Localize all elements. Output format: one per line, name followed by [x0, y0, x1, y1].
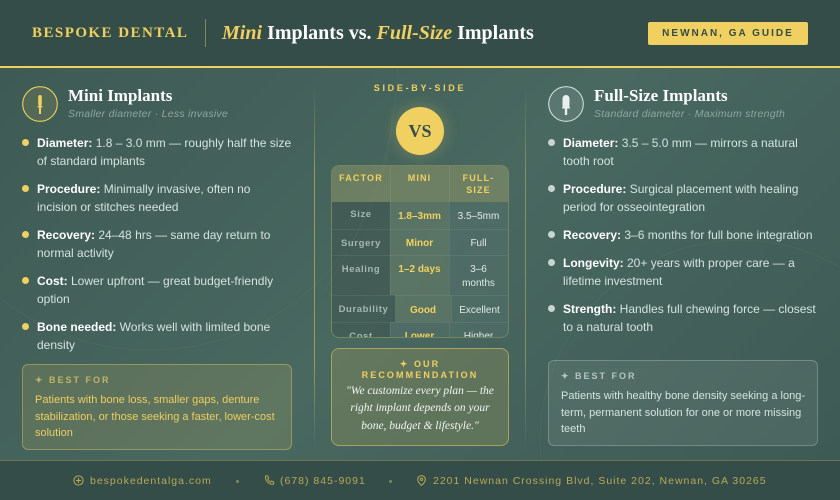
label: ✦ BEST FOR [561, 371, 637, 381]
bullet list: Recovery: 3–6 months for full bone integration [563, 228, 812, 242]
VS badge: VS [408, 121, 432, 141]
comparison table: Healing [342, 264, 380, 275]
footer [0, 460, 840, 500]
icon: mini implant [22, 86, 58, 122]
bullet list: tooth root [563, 154, 614, 168]
bullet list: of standard implants [37, 154, 145, 168]
table header: FACTOR [339, 173, 383, 183]
bullet list: normal activity [37, 246, 114, 260]
bullet list: Longevity: 20+ years with proper care — a [563, 256, 795, 270]
comparison table: Surgery [341, 238, 381, 249]
comparison table: Excellent [459, 305, 500, 316]
bullet list: Bone needed: Works well with limited bone [37, 320, 270, 334]
bullet list: Diameter: 1.8 – 3.0 mm — roughly half the size [37, 136, 291, 150]
best for box [22, 364, 292, 450]
bullet list: Strength: Handles full chewing force — closest [563, 302, 816, 316]
comparison table [331, 165, 509, 338]
bullet list [548, 136, 816, 334]
comparison table: Durability [339, 304, 388, 315]
quote: bone, budget & lifestyle." [361, 420, 479, 432]
location badge [648, 22, 808, 45]
heading: Full-Size Implants [594, 86, 728, 105]
factor column [332, 202, 390, 229]
table header: MINI [408, 173, 431, 183]
comparison table: months [462, 278, 495, 289]
heading: Mini Implants [68, 86, 172, 105]
VS badge [396, 107, 444, 155]
icon: full-size implant [548, 86, 584, 122]
panel: full-size implants [548, 86, 818, 446]
recommendation label [362, 359, 478, 380]
title: Mini Implants vs. Full-Size Implants [222, 22, 534, 44]
comparison table: Good [410, 305, 436, 316]
bullet list: Cost: Lower upfront — great budget-friendly [37, 274, 273, 288]
text: Patients with bone loss, smaller gaps, denture stabilization, or those seeking a faster, lower-cost solution [35, 394, 275, 439]
background [0, 68, 840, 460]
side-by-side label: SIDE-BY-SIDE [374, 83, 466, 93]
bullet list: Procedure: Minimally invasive, often no [37, 182, 250, 196]
factor column: Size [350, 209, 372, 220]
recommendation label: ✦ OUR [400, 359, 440, 369]
location badge: NEWNAN, GA GUIDE [662, 28, 794, 39]
mini values: 1.8–3mm [398, 211, 441, 222]
subheading: Standard diameter · Maximum strength [594, 108, 785, 120]
bullet list: period for osseointegration [563, 200, 705, 214]
subheading: Smaller diameter · Less invasive [68, 108, 228, 120]
best for box [548, 360, 818, 446]
panel: comparison [331, 83, 509, 446]
text: Patients with healthy bone density seeking a long-term, permanent solution for one or more missing teeth [561, 390, 805, 435]
comparison table: 3–6 [470, 264, 487, 275]
bullet list: Diameter: 3.5 – 5.0 mm — mirrors a natural [563, 136, 798, 150]
comparison table: Full [470, 238, 487, 249]
brand name: BESPOKE DENTAL [32, 25, 188, 41]
quote [346, 385, 494, 432]
comparison table: 1–2 days [398, 264, 441, 275]
full-size values: 3.5–5mm [458, 211, 499, 222]
bullet list: to a natural tooth [563, 320, 653, 334]
bullet list: Recovery: 24–48 hrs — same day return to [37, 228, 270, 242]
bullet list: density [37, 338, 75, 352]
icon: globe [73, 475, 84, 486]
bullet list: Procedure: Surgical placement with healing [563, 182, 798, 196]
quote: right implant depends on your [350, 402, 490, 414]
bullet list [22, 136, 291, 352]
mini column highlight [390, 202, 449, 295]
bullet list: incision or stitches needed [37, 200, 178, 214]
table header: SIZE [466, 185, 491, 195]
label: ✦ BEST FOR [35, 375, 111, 385]
quote: "We customize every plan — the [346, 385, 494, 397]
panel: mini implants [22, 86, 292, 450]
table header: FULL- [463, 173, 494, 183]
table header [332, 166, 508, 202]
icon: map pin [417, 475, 426, 486]
bullet list: lifetime investment [563, 274, 662, 288]
comparison table: Minor [406, 238, 433, 249]
address: 2201 Newnan Crossing Blvd, Suite 202, Newnan, GA 30265 [433, 475, 767, 487]
website: bespokedentalga.com [90, 475, 212, 487]
phone: (678) 845-9091 [280, 475, 366, 487]
recommendation box [331, 348, 509, 446]
icon: phone [265, 475, 274, 485]
recommendation label: RECOMMENDATION [362, 370, 478, 380]
header [0, 0, 840, 68]
bullet list: option [37, 292, 70, 306]
